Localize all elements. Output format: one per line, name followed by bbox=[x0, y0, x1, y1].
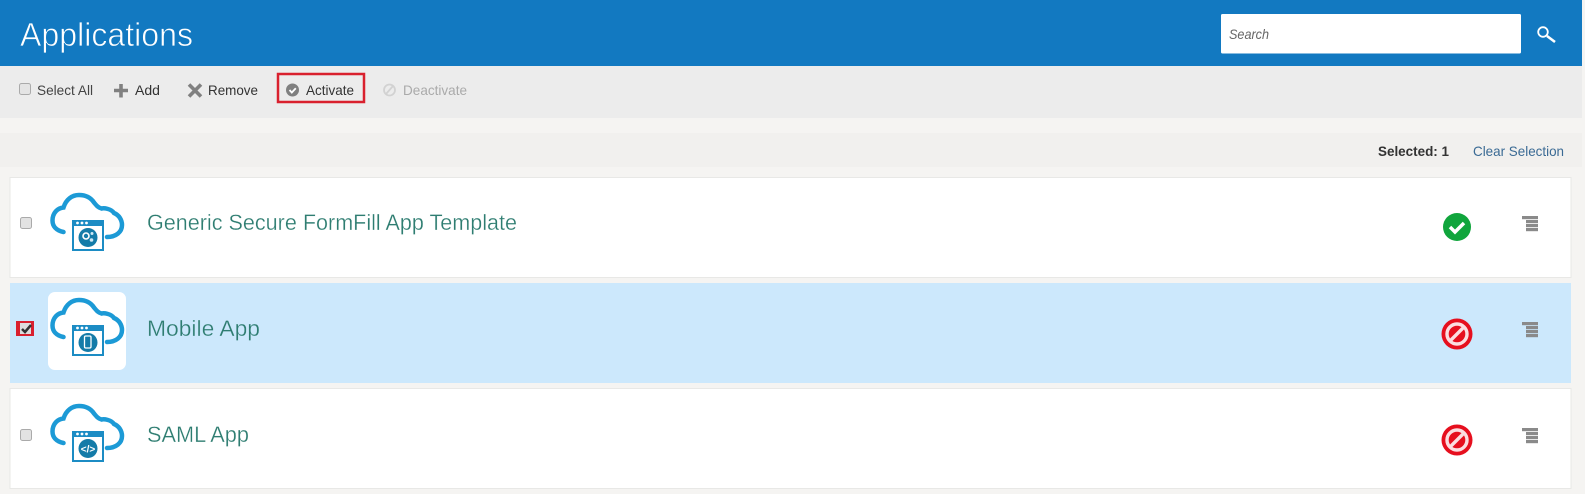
status: inactive bbox=[1442, 424, 1472, 456]
app name: Mobile App bbox=[147, 316, 260, 341]
status: active bbox=[1443, 213, 1471, 241]
row: SAML App bbox=[10, 388, 1571, 488]
status: inactive bbox=[1442, 318, 1472, 350]
selection bar bbox=[0, 133, 1582, 167]
toolbar bbox=[0, 66, 1582, 118]
activate button: Activate bbox=[306, 82, 354, 98]
add button bbox=[114, 82, 160, 98]
row menu bbox=[1522, 428, 1538, 443]
remove button: Remove bbox=[208, 82, 258, 98]
row menu bbox=[1522, 216, 1538, 231]
add button: Add bbox=[135, 82, 160, 98]
row menu bbox=[1522, 322, 1538, 337]
search box bbox=[1221, 14, 1521, 54]
app name: SAML App bbox=[147, 422, 249, 447]
row: Generic Secure FormFill App Template bbox=[10, 178, 1571, 278]
icon: cloud app with phone bbox=[52, 300, 122, 356]
deactivate button: Deactivate bbox=[403, 82, 467, 98]
icon: search bbox=[1538, 27, 1555, 42]
select all: Select All bbox=[37, 82, 93, 98]
clear selection link: Clear Selection bbox=[1473, 143, 1564, 159]
icon: cloud app with gears bbox=[52, 195, 122, 251]
checkbox bbox=[20, 218, 32, 228]
search box: Search bbox=[1229, 26, 1269, 42]
title: Applications bbox=[20, 16, 193, 53]
header bar bbox=[0, 0, 1582, 66]
selected checkbox bbox=[16, 321, 34, 336]
activate button bbox=[278, 74, 364, 102]
selected count: Selected: 1 bbox=[1378, 143, 1449, 159]
icon: cloud app with code: </> bbox=[81, 444, 95, 456]
icon: cloud app with code bbox=[52, 406, 122, 462]
app name: Generic Secure FormFill App Template bbox=[147, 210, 517, 235]
icon tile bbox=[48, 292, 126, 370]
row: Mobile App bbox=[10, 283, 1571, 383]
checkbox bbox=[20, 430, 32, 440]
